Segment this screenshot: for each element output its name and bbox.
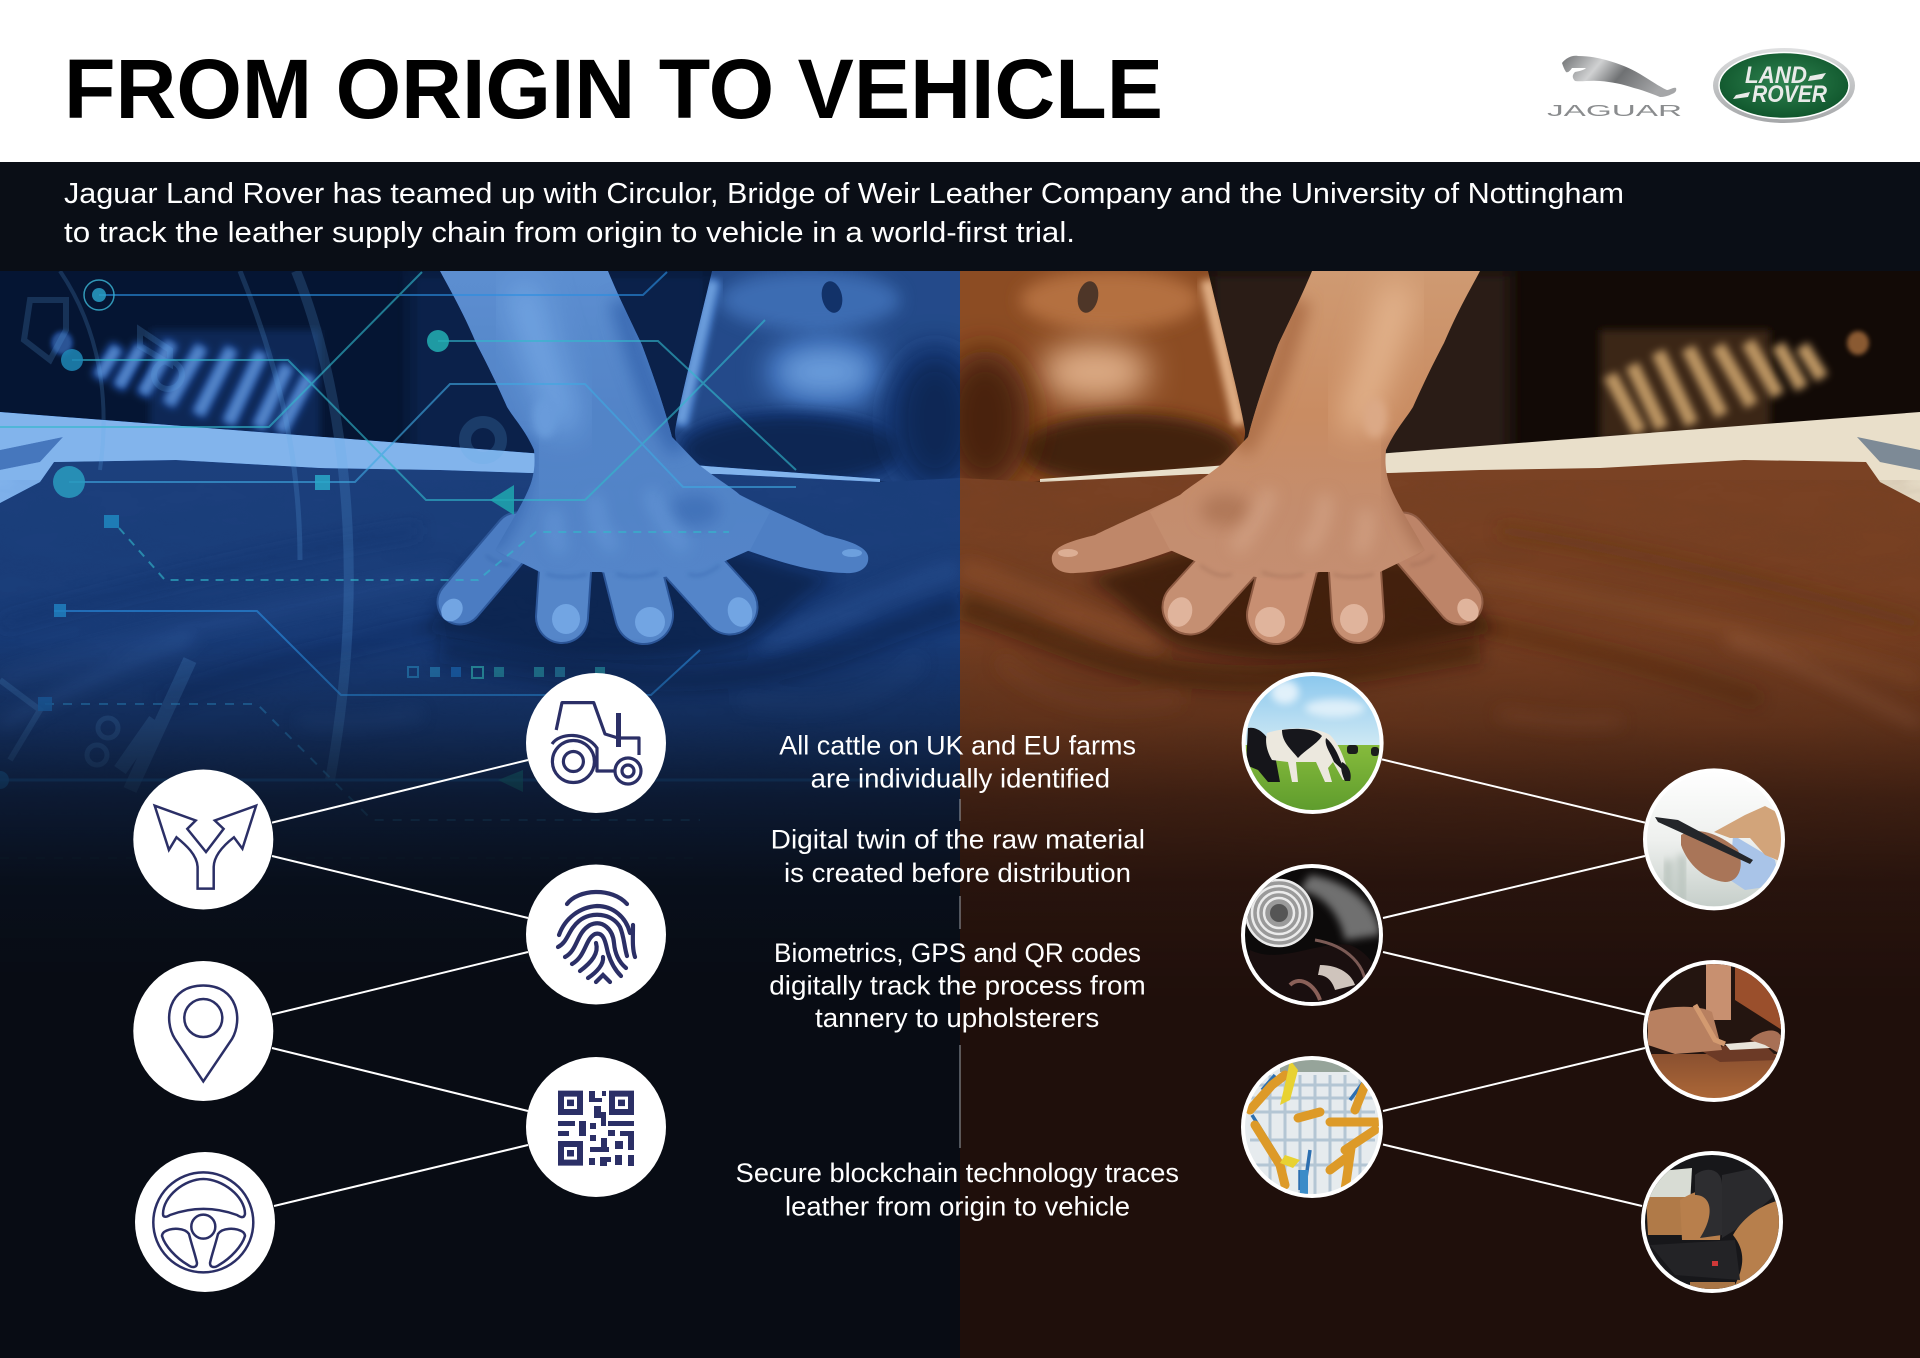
- text: biometrics tracking: Biometrics, GPS and QR codes: [774, 938, 1141, 968]
- icon: QR code: [526, 1057, 666, 1197]
- text: cattle identified: are individually identified: [811, 764, 1110, 794]
- intro band: [0, 162, 1920, 271]
- text: cattle identified: [779, 730, 1136, 794]
- icon: tractor: [526, 673, 666, 813]
- logo: Land Rover: ROVER: [1752, 81, 1828, 108]
- text: biometrics tracking: digitally track the process from: [769, 971, 1146, 1001]
- logo: Jaguar: JAGUAR: [1547, 103, 1682, 120]
- connectors: left chain: [272, 760, 528, 1206]
- title: FROM ORIGIN TO VEHICLE: [64, 42, 1163, 136]
- circuit nodes: [0, 280, 605, 792]
- photo: cow in field: [1242, 672, 1384, 815]
- photo: robot assembly line: [1240, 1055, 1385, 1200]
- fade to dark brown: [960, 667, 1920, 1071]
- photo: leather rolls: [1240, 864, 1385, 1010]
- intro text: [64, 178, 1624, 249]
- text: cattle identified: All cattle on UK and EU farms: [779, 730, 1136, 760]
- logo: Land Rover: [1713, 48, 1855, 123]
- centre dividers: [959, 799, 961, 1148]
- text: biometrics tracking: [769, 938, 1146, 1033]
- header: [0, 0, 1920, 162]
- photo: cutting leather by hand: [1643, 960, 1785, 1104]
- icon: location pin: [133, 961, 273, 1101]
- panel: left digital half: [0, 270, 980, 1358]
- text: digital twin: Digital twin of the raw material: [771, 825, 1145, 855]
- text: blockchain: Secure blockchain technology traces: [736, 1158, 1179, 1188]
- icon: steering wheel: [135, 1152, 275, 1292]
- icon: forking arrows: [133, 770, 273, 910]
- photo: car seats interior: [1640, 1150, 1785, 1295]
- photo: hands using smartphone: [1643, 768, 1785, 910]
- fade to dark: [0, 652, 960, 1071]
- photo: hand on leather: [960, 271, 1920, 892]
- text: blockchain: [736, 1158, 1179, 1221]
- photo: hand on leather in blue: [0, 271, 960, 879]
- connectors: right chain: [1382, 759, 1645, 1206]
- text: digital twin: is created before distribution: [784, 858, 1131, 888]
- text: biometrics tracking: tannery to upholsterers: [815, 1003, 1099, 1033]
- background tech shapes: [0, 271, 501, 790]
- circuit lines: [0, 272, 960, 858]
- text: blockchain: leather from origin to vehicle: [785, 1191, 1130, 1221]
- intro text: to track the leather supply chain from origin to vehicle in a world-first trial.: [64, 217, 1075, 249]
- intro text: Jaguar Land Rover has teamed up with Circulor, Bridge of Weir Leather Company and the University of Nottingham: [64, 178, 1624, 210]
- panel: right physical half: [940, 270, 1920, 1358]
- icon: fingerprint: [526, 864, 666, 1004]
- logo: Jaguar: [1547, 56, 1682, 120]
- logo: Land Rover: LAND: [1745, 62, 1807, 89]
- text: digital twin: [771, 825, 1145, 888]
